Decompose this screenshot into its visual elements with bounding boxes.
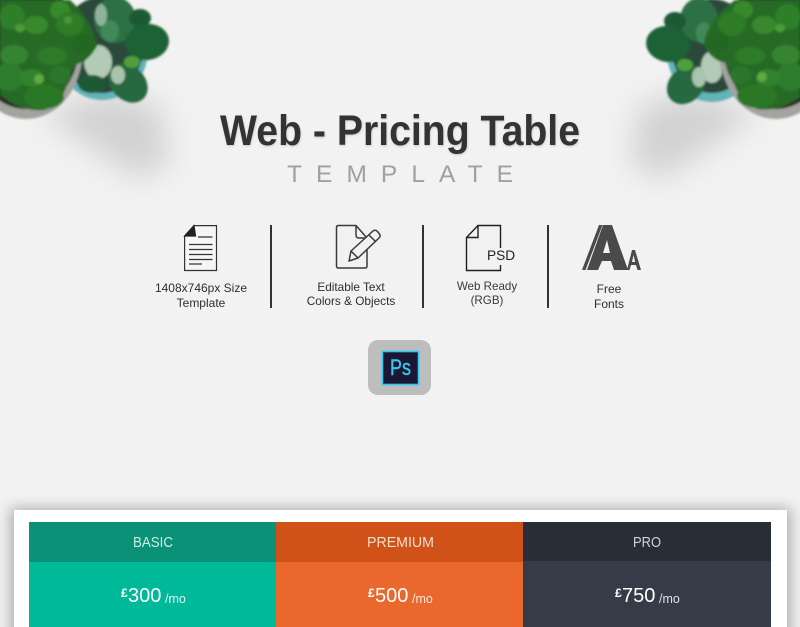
caption: free fonts: Fonts	[594, 297, 624, 311]
caption: web ready: (RGB)	[471, 294, 504, 307]
divider 1	[270, 225, 272, 308]
divider 2	[422, 225, 424, 308]
title: Web - Pricing Table	[220, 108, 580, 156]
column: pro	[523, 522, 771, 627]
caption: web ready: Web Ready	[457, 280, 517, 293]
illustration: potted plants top left	[0, 0, 171, 178]
price: basic: £	[121, 586, 128, 600]
price: premium: £	[368, 586, 375, 600]
price: basic: 300	[128, 585, 161, 607]
icon: Photoshop badge: Ps	[390, 355, 411, 380]
subtitle: TEMPLATE	[287, 161, 513, 188]
pricing table card	[10, 508, 791, 627]
column: basic	[29, 522, 276, 627]
plan name: basic: BASIC	[133, 535, 173, 551]
price: basic: /mo	[165, 592, 186, 606]
icon: A4 document	[185, 226, 216, 270]
plan name: premium: PREMIUM	[367, 535, 434, 551]
feature: size template	[155, 226, 247, 310]
icon: page and pencil	[336, 226, 380, 268]
icon: font letters	[582, 225, 641, 270]
price: pro: £	[615, 586, 622, 600]
caption: editable text: Colors & Objects	[307, 294, 395, 308]
feature: free fonts	[582, 225, 641, 311]
caption: editable text: Editable Text	[317, 280, 385, 294]
price: premium: 500	[375, 585, 408, 607]
caption: free fonts: Free	[597, 282, 622, 296]
title: Web - Pricing Table	[220, 107, 580, 155]
icon: Photoshop badge	[368, 340, 431, 395]
price: premium: /mo	[412, 592, 433, 606]
price: pro: /mo	[659, 592, 680, 606]
illustration: potted plants top right	[630, 0, 800, 178]
column: premium	[276, 522, 523, 627]
caption: size template: Template	[177, 296, 226, 310]
feature: web ready	[457, 226, 517, 307]
plan name: pro: PRO	[633, 535, 661, 551]
divider 3	[547, 225, 549, 308]
price: pro: 750	[622, 585, 655, 607]
icon: PSD file: PSD	[487, 248, 515, 263]
caption: size template: 1408x746px Size	[155, 281, 247, 295]
feature: editable text	[307, 226, 395, 308]
